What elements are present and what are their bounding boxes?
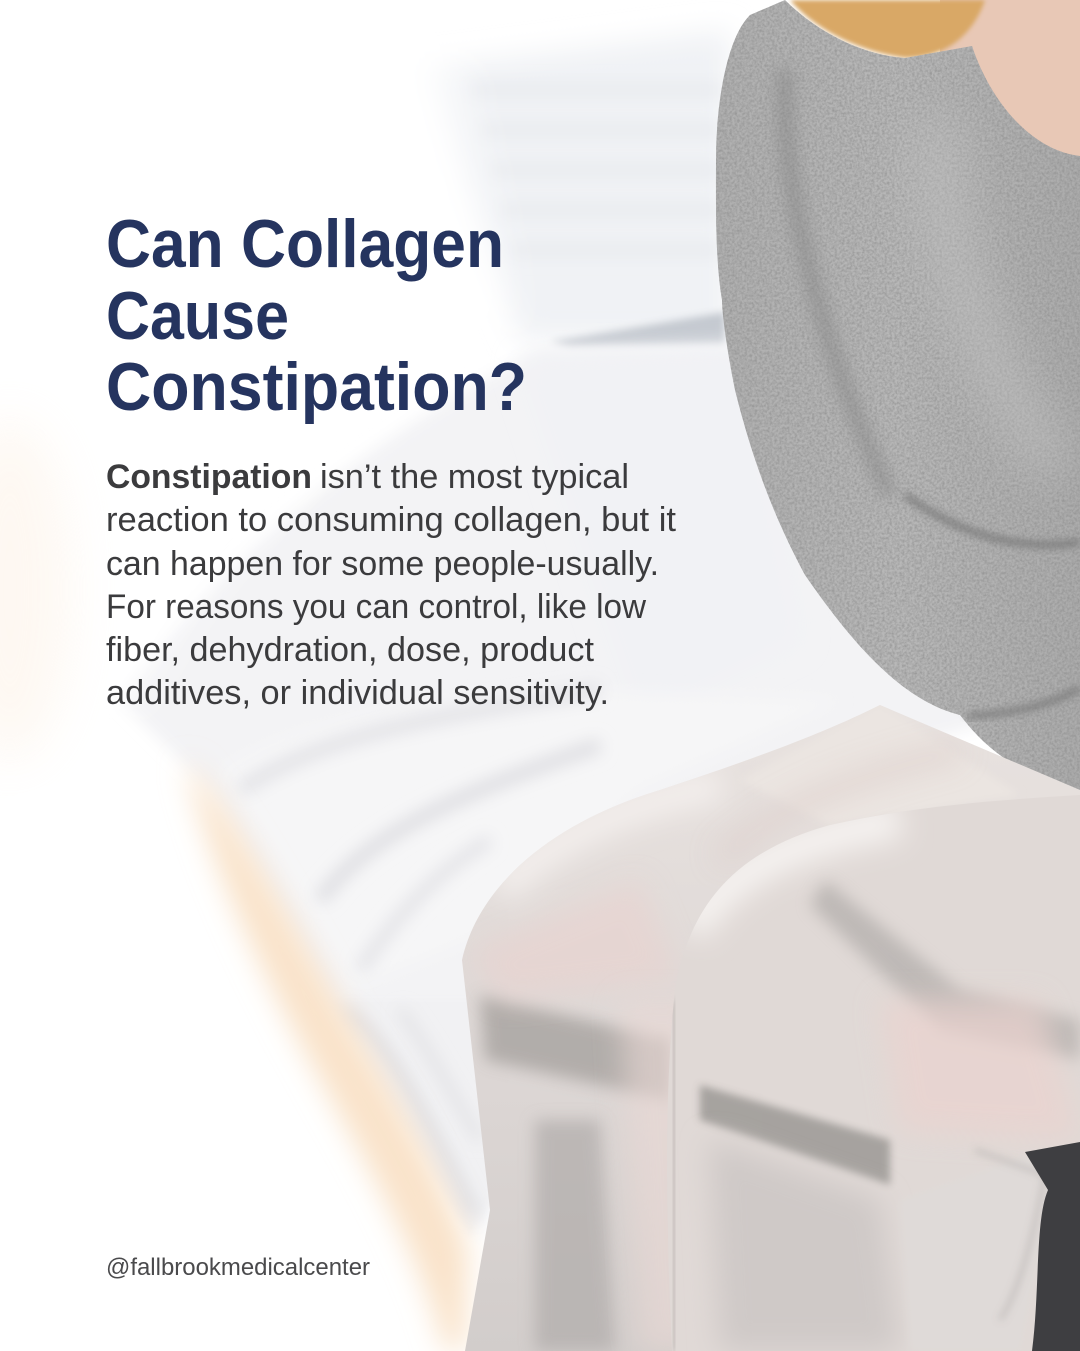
body paragraph: additives, or individual sensitivity. [106, 674, 609, 712]
photo: plaid pajama front leg [660, 790, 1080, 1351]
photo: hair and neck [790, 0, 1080, 170]
title [106, 206, 527, 425]
body paragraph: reaction to consuming collagen, but it [106, 501, 677, 539]
body paragraph: Constipation [106, 458, 312, 496]
body paragraph: fiber, dehydration, dose, product [106, 631, 595, 669]
title: Cause [106, 278, 289, 354]
social handle: @fallbrookmedicalcenter [106, 1254, 370, 1281]
photo: plaid pajama back leg [440, 690, 1080, 1351]
body paragraph: isn’t the most typical [320, 458, 629, 496]
title: Can Collagen [106, 206, 504, 282]
body paragraph: can happen for some people-usually. [106, 545, 659, 583]
photo: grey sweater [716, 0, 1080, 790]
body paragraph: For reasons you can control, like low [106, 588, 646, 626]
soft white and peach left fade [0, 0, 500, 1351]
title: Constipation? [106, 349, 527, 425]
body paragraph [106, 458, 677, 712]
photo: dark area under knee [1025, 1142, 1080, 1351]
